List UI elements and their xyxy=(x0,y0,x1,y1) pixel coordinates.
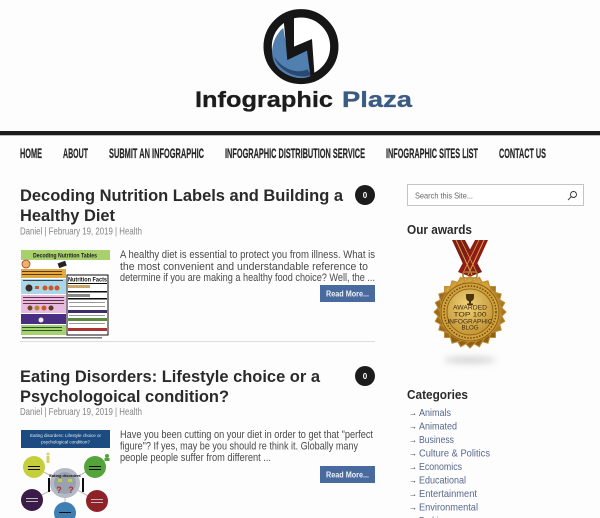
post 1 thumbnail: Decoding Nutrition Tables xyxy=(33,254,98,260)
post 2 excerpt xyxy=(120,429,373,464)
navigation menu xyxy=(20,145,546,161)
post 2 thumbnail xyxy=(21,430,110,518)
header rule xyxy=(0,131,600,136)
navigation menu: INFOGRAPHIC DISTRIBUTION SERVICE xyxy=(225,145,365,161)
post 2 comment badge xyxy=(355,366,375,386)
heading: categories: Categories xyxy=(407,387,468,402)
post 1 xyxy=(20,185,375,340)
post 1 excerpt: A healthy diet is essential to protect you from illness. What is xyxy=(120,249,375,261)
navigation menu: SUBMIT AN INFOGRAPHIC xyxy=(109,145,204,161)
post 2 title xyxy=(20,367,321,406)
categories list: Culture & Politics xyxy=(419,448,490,460)
navigation menu: INFOGRAPHIC SITES LIST xyxy=(386,145,478,161)
logo wordmark xyxy=(195,87,413,112)
categories list xyxy=(409,407,490,518)
post 1 excerpt xyxy=(120,249,375,284)
medal text xyxy=(448,306,493,332)
post 2 thumbnail: ? xyxy=(56,485,62,495)
categories list: → xyxy=(409,476,417,485)
post 1 meta: Daniel | February 19, 2019 | Health xyxy=(20,226,142,238)
post 2 title: Eating Disorders: Lifestyle choice or a xyxy=(20,367,321,386)
logo wordmark: Infographic xyxy=(195,87,333,112)
logo xyxy=(195,13,413,112)
logo wordmark: Plaza xyxy=(342,87,413,112)
post 2 meta: Daniel | February 19, 2019 | Health xyxy=(20,406,142,418)
medal text: INFOGRAPHIC xyxy=(448,320,493,326)
post 1 read more button: Read More... xyxy=(326,290,369,298)
categories list: → xyxy=(409,503,417,512)
categories list: Business xyxy=(419,434,454,446)
award medal badge xyxy=(434,240,506,364)
post 1 comment badge xyxy=(355,185,375,205)
post 2 read more button: Read More... xyxy=(326,470,369,480)
post 2 thumbnail: Eating disorders: Lifestyle choice or xyxy=(30,433,102,438)
post 2 thumbnail: Eating disorders xyxy=(49,473,82,478)
post 1 excerpt: determine if you are making a healthy food choice? Well, the ... xyxy=(120,272,375,284)
icon: trophy xyxy=(466,294,474,305)
navigation menu: HOME xyxy=(20,145,42,161)
post 2 thumbnail: ? xyxy=(68,485,74,495)
navigation menu: ABOUT xyxy=(63,145,88,161)
categories list: → xyxy=(409,422,417,431)
post 1 title xyxy=(20,186,344,225)
categories list: Educational xyxy=(419,474,466,486)
medal text: AWARDED xyxy=(453,306,488,312)
post 2 comment badge: 0 xyxy=(363,372,368,381)
medal text: TOP 100 xyxy=(454,312,487,318)
post 2 excerpt: figure"? If yes, may be you should re think it. Globally many xyxy=(120,440,358,452)
icon: lightning bolt ring xyxy=(268,13,334,80)
categories list: Economics xyxy=(419,461,462,473)
post 2 title: Psychologoical condition? xyxy=(20,387,229,406)
medal body xyxy=(434,276,506,348)
categories list: Environmental xyxy=(419,502,478,514)
post 2 excerpt: Have you been cutting on your diet in order to get that "perfect xyxy=(120,429,373,441)
divider xyxy=(20,341,375,342)
post 1 title: Healthy Diet xyxy=(20,206,115,225)
post 1 comment badge: 0 xyxy=(363,191,368,200)
categories list: Animals xyxy=(419,407,451,419)
medal ribbon xyxy=(452,240,488,278)
categories list: Animated xyxy=(419,420,457,432)
post 2 excerpt: people people suffer from different ... xyxy=(120,452,271,464)
sidebar search box: Search this Site... xyxy=(415,190,473,200)
post 2 xyxy=(20,366,375,518)
navigation menu: CONTACT US xyxy=(499,145,546,161)
post 1 title: Decoding Nutrition Labels and Building a xyxy=(20,186,344,205)
icon: magnifier xyxy=(568,192,576,200)
sidebar search box xyxy=(408,184,584,206)
post 2 read more button xyxy=(320,466,375,483)
post 1 thumbnail: Nutrition Facts xyxy=(68,278,108,284)
categories list: → xyxy=(409,462,417,472)
categories list: Entertainment xyxy=(419,488,477,500)
medal text: BLOG xyxy=(462,326,479,332)
post 1 thumbnail xyxy=(21,250,110,340)
post 2 thumbnail: psychological condition? xyxy=(41,440,90,444)
categories list: → xyxy=(409,490,417,498)
categories list: → xyxy=(409,436,417,444)
categories list: → xyxy=(409,449,417,458)
heading: our awards: Our awards xyxy=(407,222,472,237)
categories list: → xyxy=(409,408,417,418)
post 1 read more button xyxy=(320,285,375,302)
post 1 excerpt: the most convenient and understandable reference to xyxy=(120,261,368,273)
